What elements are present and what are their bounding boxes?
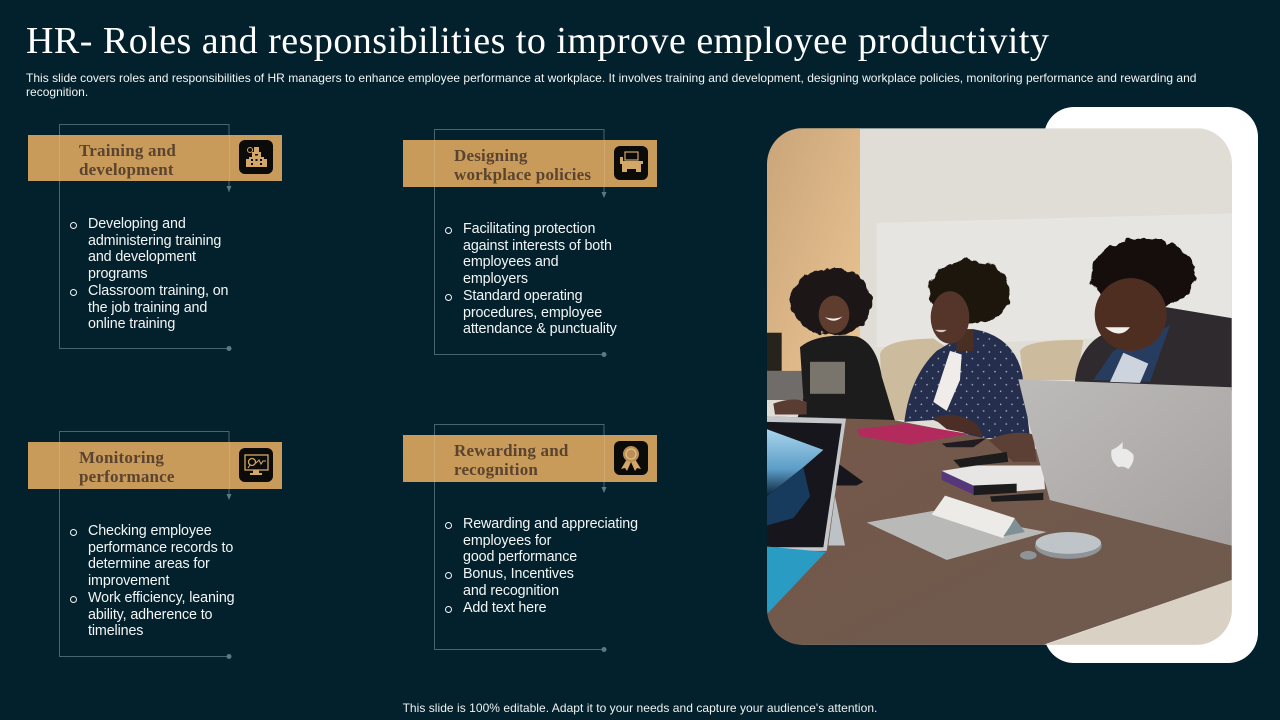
icon: building xyxy=(239,140,273,174)
heading: training and development xyxy=(79,141,176,179)
bullet list: training and development xyxy=(70,216,228,332)
bullet list: training and development: programs xyxy=(88,266,147,282)
panel: designing workplace policies xyxy=(403,129,657,357)
bullet list: designing workplace policies: employees and xyxy=(463,254,558,270)
bullet list: rewarding and recognition: Bonus, Incentives xyxy=(463,566,574,582)
icon: monitor with chart xyxy=(239,448,273,482)
photo: team meeting at a table xyxy=(767,128,1232,645)
bullet list: monitoring performance: performance records to xyxy=(88,540,233,556)
icon: award ribbon xyxy=(614,441,648,475)
bullet list: monitoring performance: determine areas for xyxy=(88,556,210,572)
bullet list: training and development: the job training and xyxy=(88,300,207,316)
bullet list: designing workplace policies: Facilitating protection xyxy=(463,221,595,237)
bullet list: monitoring performance: ability, adherence to xyxy=(88,607,212,623)
bullet list: training and development: administering training xyxy=(88,233,221,249)
heading: rewarding and recognition: Rewarding and xyxy=(454,441,569,460)
bullet list: rewarding and recognition: Rewarding and appreciating xyxy=(463,516,638,532)
bullet list: rewarding and recognition: good performance xyxy=(463,549,577,565)
bullet list: training and development: and development xyxy=(88,249,196,265)
bullet list: monitoring performance: timelines xyxy=(88,623,143,639)
bullet list: monitoring performance: improvement xyxy=(88,573,169,589)
title: HR- Roles and responsibilities to improve employee productivity xyxy=(26,20,1049,62)
bullet list: designing workplace policies: employers xyxy=(463,271,528,287)
bullet list: training and development: online training xyxy=(88,316,175,332)
bullet list: monitoring performance: Work efficiency, leaning xyxy=(88,590,235,606)
footer note: This slide is 100% editable. Adapt it to your needs and capture your audience's attention. xyxy=(403,701,877,715)
bullet list: designing workplace policies xyxy=(445,221,617,337)
subtitle description: This slide covers roles and responsibilities of HR managers to enhance employee performance at workplace. It involves training and development, designing workplace policies, monitoring performance and rewarding and recognition. xyxy=(26,71,1196,98)
heading: rewarding and recognition xyxy=(454,441,569,479)
bullet list: rewarding and recognition: employees for xyxy=(463,533,551,549)
bullet list: training and development: Classroom training, on xyxy=(88,283,228,299)
panel: monitoring performance xyxy=(28,431,282,659)
bullet list: training and development: Developing and xyxy=(88,216,186,232)
heading: designing workplace policies xyxy=(454,146,591,184)
heading: monitoring performance: performance xyxy=(79,467,175,486)
bullet list: designing workplace policies: attendance & punctuality xyxy=(463,321,617,337)
bullet list: rewarding and recognition: Add text here xyxy=(463,600,546,616)
icon: desk with monitor xyxy=(614,146,648,180)
heading: training and development: development xyxy=(79,160,174,179)
panel: rewarding and recognition xyxy=(403,424,657,652)
bullet list: designing workplace policies: procedures, employee xyxy=(463,305,602,321)
heading: monitoring performance xyxy=(79,448,175,486)
bullet list: rewarding and recognition: and recognition xyxy=(463,583,559,599)
heading: designing workplace policies: workplace policies xyxy=(454,165,591,184)
bullet list: rewarding and recognition xyxy=(445,516,638,616)
bullet list: monitoring performance xyxy=(70,523,235,639)
heading: training and development: Training and xyxy=(79,141,176,160)
heading: monitoring performance: Monitoring xyxy=(79,448,164,467)
panel: training and development xyxy=(28,124,282,351)
heading: designing workplace policies: Designing xyxy=(454,146,528,165)
bullet list: monitoring performance: Checking employee xyxy=(88,523,212,539)
bullet list: designing workplace policies: Standard operating xyxy=(463,288,582,304)
white backing shape xyxy=(1044,107,1258,663)
heading: rewarding and recognition: recognition xyxy=(454,460,538,479)
bullet list: designing workplace policies: against interests of both xyxy=(463,238,612,254)
